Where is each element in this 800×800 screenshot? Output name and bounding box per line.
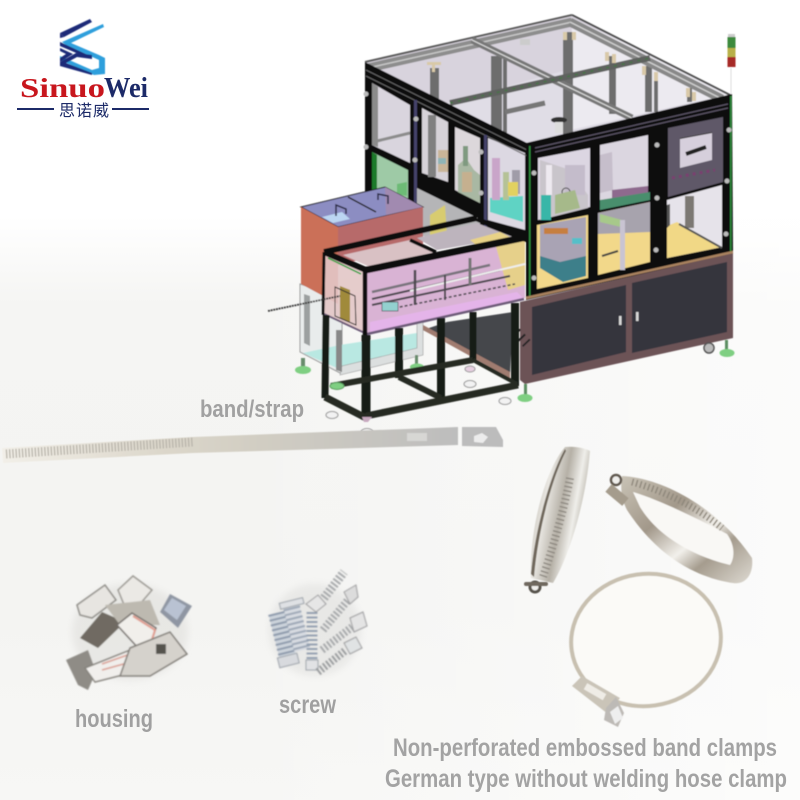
logo rule right [112, 108, 149, 110]
slim screw [306, 572, 344, 612]
strap slots [6, 442, 193, 454]
housing piece [77, 585, 116, 618]
lower window 2 [598, 202, 650, 275]
table top glass [343, 240, 435, 267]
lower bay [417, 188, 480, 245]
rear posts [430, 32, 692, 166]
machine: caster and feet of cabinet [518, 340, 734, 402]
logo: SinuoWei [17, 19, 149, 120]
machine: protruding feed rod [268, 296, 340, 311]
door handles [619, 316, 622, 325]
fat screw [279, 598, 315, 653]
conveyor machinery [372, 258, 525, 310]
housing piece [118, 576, 152, 607]
bin left face [301, 207, 338, 304]
logo rule left [17, 108, 54, 110]
clamp screw [530, 582, 540, 592]
label: housing: housing [75, 705, 153, 733]
upper window 2 [600, 135, 648, 207]
middle screw [306, 612, 318, 670]
machine: 3D CAD model of the assembly line [268, 15, 736, 436]
fat screw [267, 611, 299, 668]
machine: feeder bin stand [295, 284, 424, 375]
machine: table lower frame and legs [325, 303, 518, 422]
beacon on ceiling [551, 117, 567, 123]
enclosure front [367, 238, 525, 333]
window lower right [667, 185, 722, 258]
label: screw: screw [279, 691, 336, 719]
machine: table levelling feet [326, 366, 511, 436]
hose clamp photo: upright clamp [524, 447, 590, 592]
hose clamp photo: flat clamp [563, 564, 729, 727]
icon: logo mark [60, 19, 105, 75]
bolts [532, 128, 732, 280]
top beam of left wall [366, 70, 527, 150]
bin right face [338, 207, 423, 265]
machine: ceiling and rear walls seen through glass [365, 15, 730, 166]
window [422, 108, 448, 182]
machine: table enclosure [322, 218, 527, 335]
window [372, 83, 410, 163]
lower window 1 [537, 215, 588, 289]
caption [385, 734, 787, 793]
housing piece [66, 650, 96, 690]
clamp screw [611, 475, 621, 485]
cabinet door left [532, 285, 626, 375]
clamp housing and screw [572, 676, 620, 714]
machine: lower cabinet with doors [520, 252, 733, 384]
cabinet door right [632, 262, 727, 353]
rear lower bar [377, 129, 425, 142]
bin handles [336, 205, 346, 216]
strap stamp marks [407, 433, 427, 441]
brackets [427, 32, 696, 101]
enclosure left face [323, 254, 367, 333]
enclosure floor [370, 292, 523, 333]
signal tower light [728, 34, 736, 94]
wordmark: Sinuo [20, 73, 105, 103]
slim screw [323, 585, 358, 630]
window [455, 127, 480, 203]
control panel [668, 117, 723, 197]
housing piece [117, 613, 156, 650]
ceiling cross beams [472, 40, 632, 118]
bin top [301, 187, 423, 227]
upper window 1 [538, 148, 590, 220]
green lower panel [372, 152, 408, 200]
machine: feeder bin [301, 187, 423, 304]
housing parts photo [66, 576, 192, 690]
slim screw [318, 637, 362, 672]
band strap photo [2, 427, 503, 463]
machine: left wall with windows [364, 62, 527, 245]
machine: front right wall with windows [526, 94, 733, 300]
window with teal floor [488, 138, 525, 230]
housing piece [160, 594, 192, 628]
machine: side dark panel behind the table [423, 312, 527, 378]
top rear beams [365, 15, 572, 62]
screw parts photo [267, 572, 367, 676]
housing piece [120, 632, 187, 676]
chinese name: 思诺威 [59, 102, 109, 120]
bolts [364, 92, 484, 196]
hose clamp photo: tilted clamp [605, 475, 752, 583]
clamp teeth [543, 478, 570, 577]
housing piece [80, 612, 125, 648]
enclosure frame [323, 218, 527, 335]
strap end tab [462, 427, 503, 447]
clamp teeth [632, 482, 722, 528]
label: band/strap: band/strap [200, 396, 304, 423]
slim screw [322, 612, 367, 650]
logo: SinuoWei: Wei [104, 73, 148, 104]
mullion accents [414, 100, 417, 230]
